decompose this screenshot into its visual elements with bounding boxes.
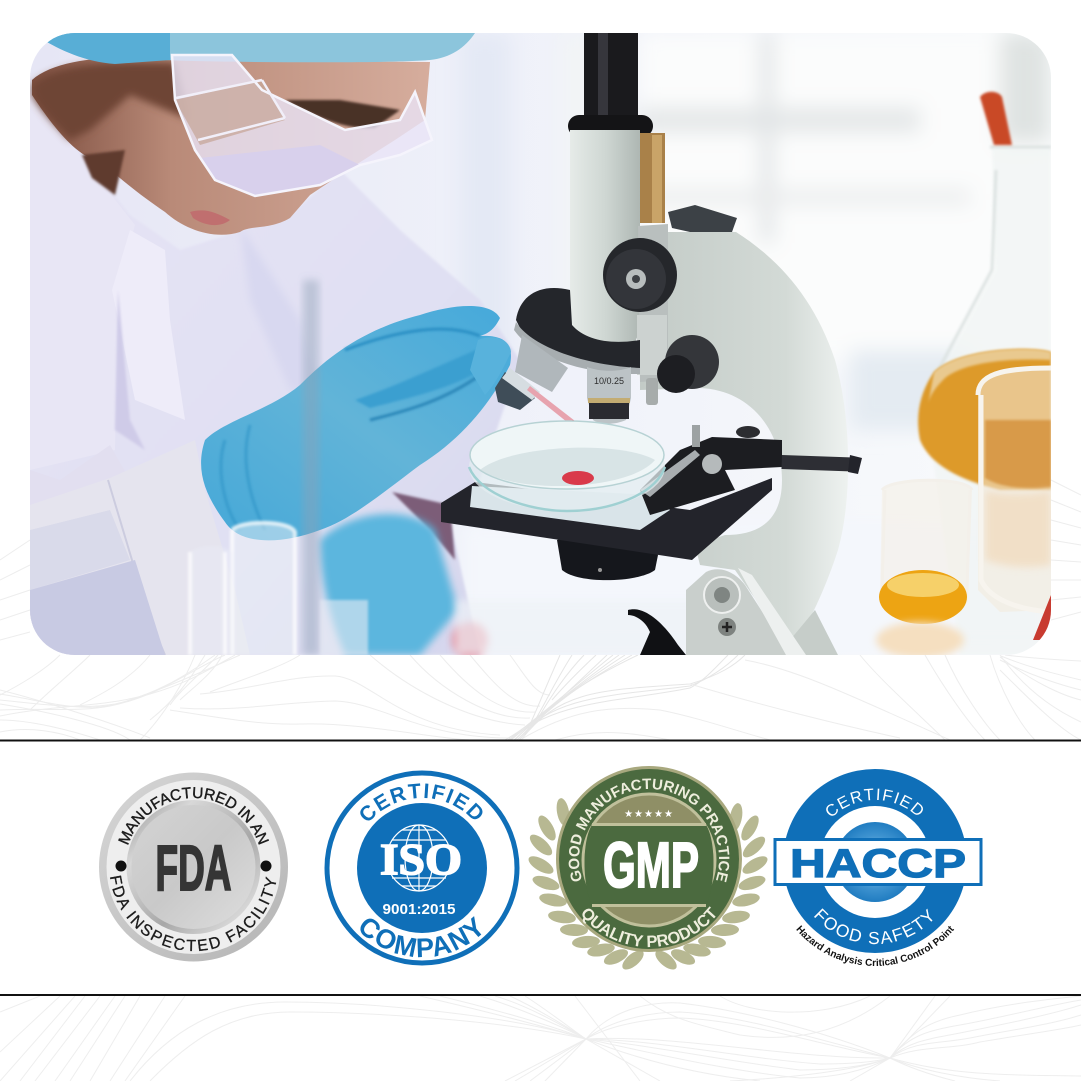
background wave pattern: lower band: [0, 996, 1081, 1081]
photo: scientist at microscope: [30, 33, 1060, 658]
objective lens right: [587, 367, 631, 424]
badge: GMP: [528, 766, 768, 970]
mechanical stage clip: [640, 425, 862, 515]
hazard analysis arc text: Hazard Analysis Critical Control Point: [796, 925, 954, 966]
rear leg of base: [790, 610, 838, 655]
coarse focus knob: [603, 238, 677, 312]
badge: FDA: FDA INSPECTED FACILITY: [110, 876, 276, 952]
FDA ring text: MANUFACTURED IN AN: [118, 787, 269, 845]
badge: FDA: [99, 772, 288, 962]
stage underside condenser: [557, 538, 658, 580]
badge: GMP: QUALITY PRODUCT: [582, 906, 716, 948]
amber flask with pipette: [916, 90, 1051, 492]
focus tube: [584, 33, 638, 121]
photo background: [30, 33, 934, 558]
badge: HACCP: [774, 769, 982, 966]
HACCP ring text: CERTIFIED: [826, 788, 923, 816]
microscope base: [686, 569, 790, 655]
hair net: [40, 33, 475, 64]
microscope arm: [640, 232, 848, 640]
background wave pattern: upper band: [0, 480, 1081, 740]
GMP stars: ★★★★★: [624, 809, 674, 820]
badge: ISO: [324, 770, 520, 966]
ISO ring text: CERTIFIED: [360, 783, 482, 820]
badge: ISO: COMPANY: [360, 916, 482, 958]
brass rack: [640, 133, 665, 223]
microscope body tube: [570, 130, 640, 346]
divider bottom: [0, 994, 1081, 996]
right glass beaker: [978, 368, 1051, 640]
FDA wordmark: FDA: [156, 832, 232, 904]
table haze: [450, 598, 492, 655]
nosepiece: [516, 288, 640, 368]
coat cuff: [30, 440, 250, 655]
badge: HACCP: FOOD SAFETY: [814, 908, 932, 944]
safety goggles: [172, 55, 432, 196]
dark stage: [441, 478, 772, 560]
microscope: [441, 33, 862, 655]
objective lens left: [495, 335, 568, 410]
ISO number: 9001:2015: [382, 901, 456, 918]
small beaker with yellow liquid: [876, 480, 972, 658]
lower blue glove: [320, 514, 458, 655]
divider top: [0, 740, 1081, 742]
blurred foreground test tubes: [190, 280, 368, 655]
HACCP band: [775, 840, 981, 884]
petri dish: [469, 421, 665, 511]
upper blue glove: [201, 306, 511, 540]
fine focus knob: [665, 335, 719, 389]
glass dropper: [527, 386, 574, 420]
ISO wordmark: ISO: [380, 835, 462, 884]
blurred window: [468, 33, 1051, 432]
face and neck: [32, 57, 430, 235]
red specimen: [562, 471, 594, 485]
GMP ring text: GOOD MANUFACTURING PRACTICE: [568, 778, 730, 882]
GMP wordmark: GMP: [603, 829, 699, 901]
HACCP wordmark: HACCP: [790, 842, 966, 886]
blurred red reflection: [452, 622, 488, 658]
laurel wreath: [526, 797, 770, 973]
objective label: 10/0.25: [594, 376, 624, 386]
sleeve behind stage: [392, 492, 455, 560]
glove fingertip over nosepiece: [470, 338, 511, 382]
globe icon: [387, 825, 451, 891]
black foot of microscope: [628, 609, 686, 655]
lab coat: [30, 174, 518, 655]
top plate: [668, 205, 737, 232]
GMP centre band: [584, 825, 714, 905]
